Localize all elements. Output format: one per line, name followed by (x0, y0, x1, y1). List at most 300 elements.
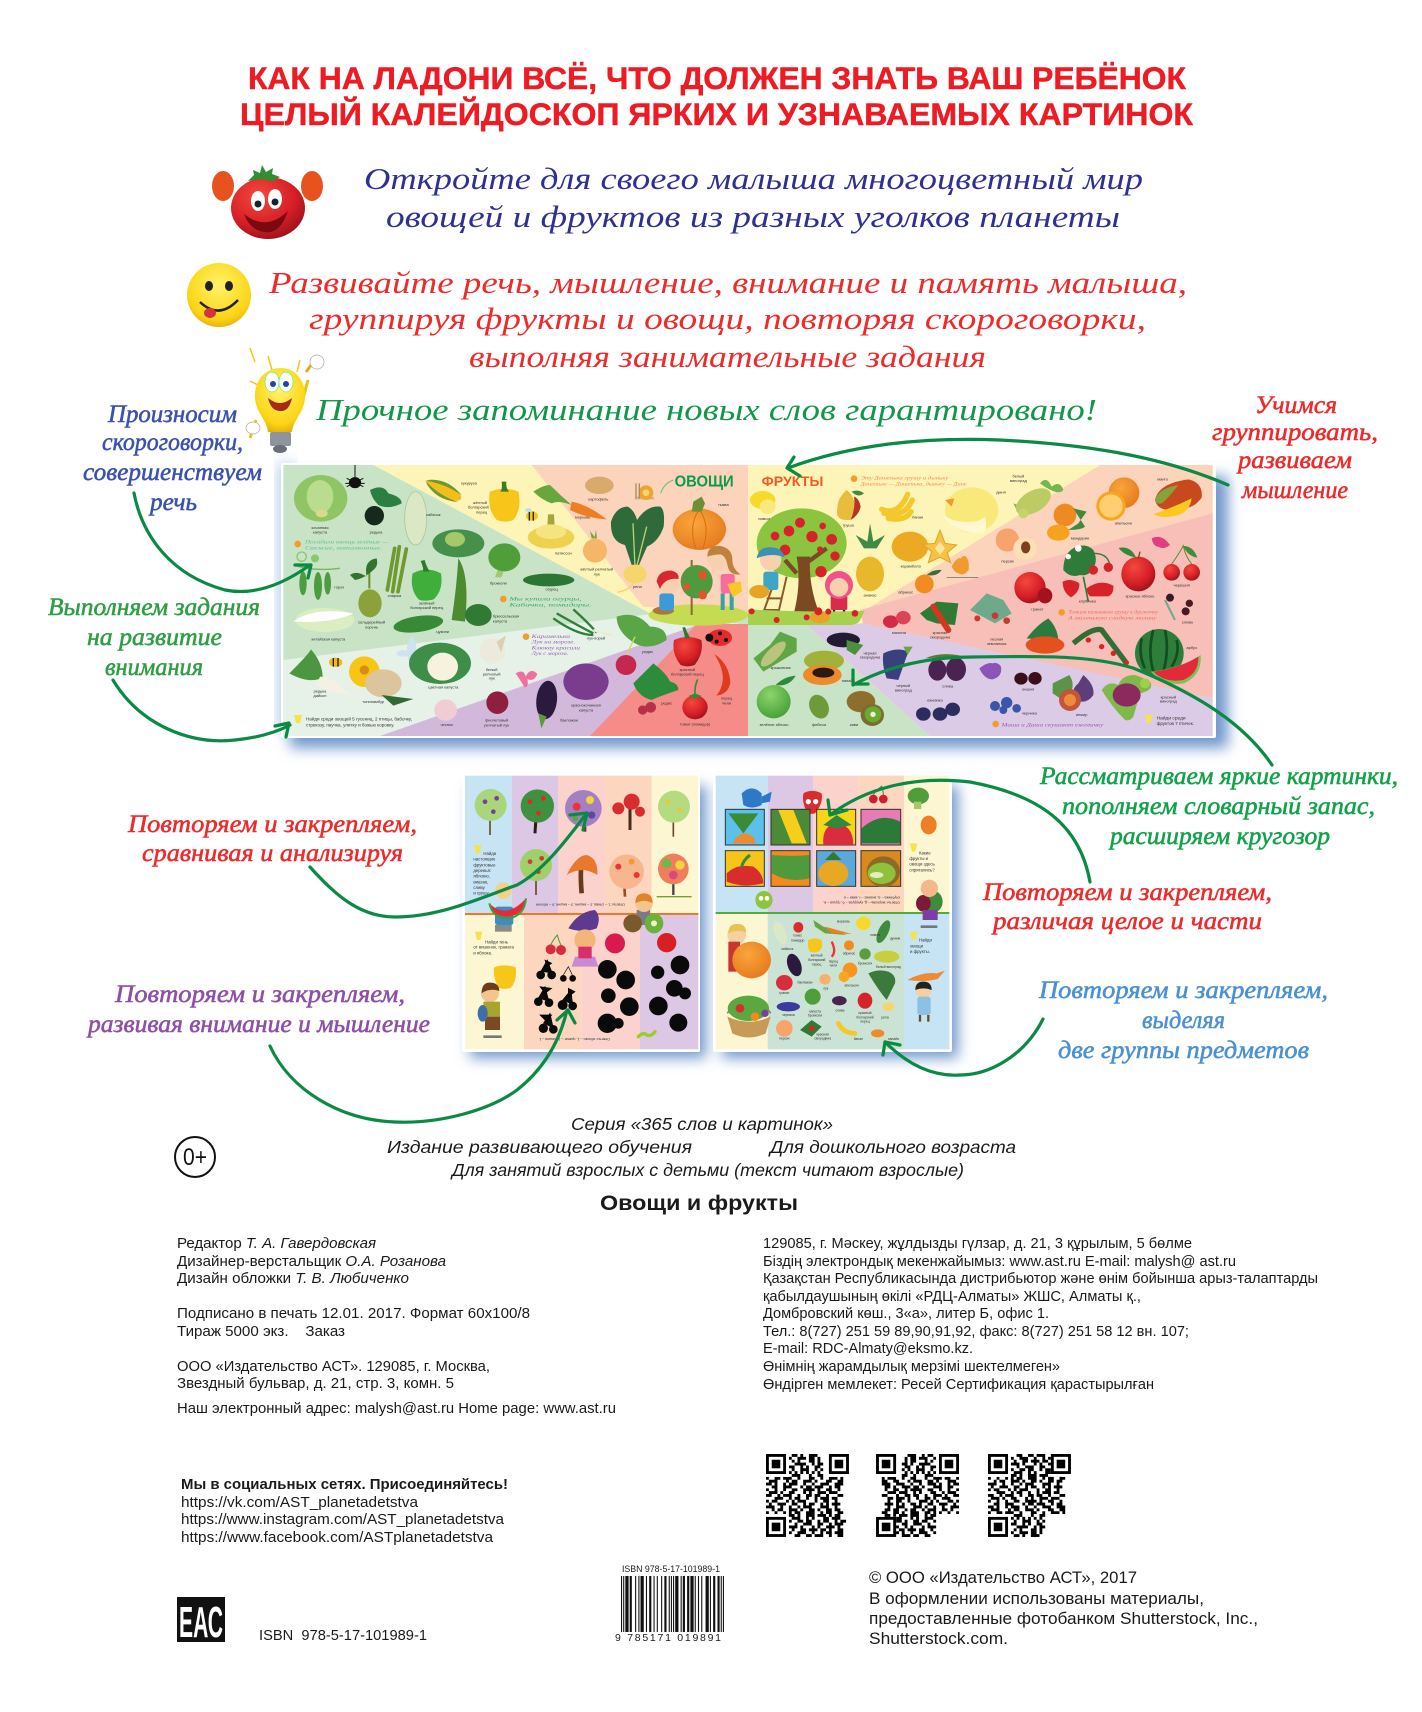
callout: picture vocabulary: Рассматриваем яркие картинки, (1039, 763, 1398, 790)
text: editors and imprint: Дизайн обложки Т. В. Любиченко (177, 1271, 409, 1287)
text: Kazakh imprint: E-mail: RDC-Almaty@eksmo.kz. (763, 1341, 973, 1357)
labels: fruit names: слива (1182, 620, 1194, 625)
text: Kazakh imprint: Өнімнің жарамдылық мерзімі шектелмеген» (763, 1359, 1060, 1375)
icon: spring onion (553, 609, 613, 636)
text: answers upside-down: Ответы: яблоко – 1, гранат – 1, вишня – 1 (539, 1037, 610, 1041)
icon: daikon (289, 649, 350, 695)
labels: fruit names: мандарин (1071, 535, 1089, 540)
labels: small fruit grid names: лимон (870, 933, 880, 937)
icon: cherries (1163, 546, 1200, 581)
icon: girl with grapes (568, 910, 599, 967)
icon: radishes small (633, 663, 678, 715)
labels: vegetable names: цветная капуста (428, 684, 459, 689)
callout: learn to group: мышление (1241, 477, 1348, 504)
text: editors and imprint (177, 1236, 616, 1417)
title: red headline: ЦЕЛЫЙ КАЛЕЙДОСКОП ЯРКИХ И УЗНАВАЕМЫХ КАРТИНОК (240, 96, 1194, 132)
icon: sunflower and jerusalem artichoke (349, 656, 413, 706)
labels: vegetable names: кочанная (312, 525, 328, 530)
labels: vegetable names: редис (642, 649, 653, 654)
labels: vegetable names: тыква (718, 502, 729, 507)
heading: ФРУКТЫ: ФРУКТЫ (762, 473, 823, 489)
labels: vegetable names: редька (314, 688, 327, 693)
icon: potato (585, 477, 614, 494)
text: series block: Издание развивающего обучения (387, 1137, 692, 1157)
callout: learn to group: Учимся (1255, 392, 1337, 419)
icon: cherry silhouettes (534, 960, 577, 1034)
icon: snail (634, 480, 673, 500)
panel: right activity page (713, 773, 958, 1058)
labels: fruit names: ежевика (927, 698, 943, 703)
hint: find shadow (473, 932, 515, 955)
heading: ОВОЩИ: ОВОЩИ (675, 474, 734, 491)
icon: ladybug (705, 629, 732, 646)
icon: light bulb character (246, 348, 324, 453)
labels: small fruit grid names: болгарский (808, 958, 825, 962)
hint: which fruits hid (909, 843, 936, 872)
icon: purple bird (979, 663, 1001, 679)
panel: vegetables page (283, 465, 748, 736)
icon: black currant (827, 633, 863, 655)
callout: two groups: две группы предметов (1058, 1037, 1309, 1064)
text: small script notes on fruits page: Тонким пальчиком грушу к дружочку (1068, 609, 1159, 616)
icon: mango (1153, 479, 1202, 517)
labels: small fruit grid names: перец (860, 1020, 870, 1024)
icon: rowan (1026, 618, 1064, 654)
icon: garlic (434, 699, 457, 721)
labels: vegetable names: дайкон (314, 693, 326, 698)
hint: find on fruits page (1145, 715, 1194, 726)
text: Kazakh imprint: 129085, г. Мәскеу, жұлдызды гүлзар, д. 21, 3 құрылым, 5 бөлме (763, 1236, 1192, 1252)
labels: vegetable names: краснокочанная (571, 703, 601, 708)
icon: black radish (365, 487, 402, 525)
labels: small fruit grid names: томат, (793, 934, 802, 938)
icon: orange bird (947, 556, 978, 577)
icon: fig (1053, 675, 1094, 711)
icon: watering can (742, 788, 772, 807)
icon: starfruit (892, 530, 957, 563)
callout: attention tasks: на развитие (87, 624, 222, 651)
labels: vegetable names: брюссельская (493, 614, 519, 619)
icon: patty pan squash (528, 514, 574, 549)
icon: oranges (1096, 477, 1139, 521)
heading: book title: Овощи и фрукты (600, 1192, 798, 1215)
labels: fruit names: виноград (1010, 478, 1027, 483)
text: answers upside-down: клубника – а, ананас – г, киви – е (844, 896, 900, 900)
labels: fruit names: малина (892, 630, 907, 635)
text: series block: Серия «365 слов и картинок» (571, 1114, 833, 1134)
icon: purple onion (486, 691, 508, 714)
icon: blackberry (916, 703, 960, 721)
callout: attention tasks: внимания (105, 654, 203, 681)
icon: brussels sprouts (432, 529, 492, 626)
labels: vegetable names: зелёный (419, 600, 435, 605)
labels: small fruit grid names: красный (859, 1011, 872, 1015)
icon: white onion (480, 636, 506, 664)
callout: attention tasks: Выполняем задания (48, 594, 260, 621)
text: answers upside-down: Ответы: морковь – д, кукуруза – б, груша – в, (823, 901, 900, 905)
text: small script notes on vegetables page: Мы купили огурцы, (508, 596, 582, 602)
icon: watermelon (1135, 629, 1201, 684)
labels: small fruit grid names: чили (830, 964, 837, 968)
callout: learn to group: группировать, (1212, 419, 1378, 446)
labels: fruit names: папайя (842, 678, 855, 683)
icon: tomato character (212, 165, 323, 239)
icon: dark cherries (1014, 672, 1042, 685)
labels: small fruit grid names: репа (881, 1015, 889, 1019)
icon: apple silhouettes (649, 956, 691, 1032)
icon: EAC mark: ЕАС (179, 1598, 223, 1647)
hint: find real fruit trees (473, 845, 625, 907)
callout: two groups (1038, 977, 1328, 1064)
callout: speak tongue twisters (83, 401, 262, 516)
labels: vegetable names: чеснок (440, 722, 453, 727)
labels: vegetable names: китайская капуста (312, 636, 346, 641)
icon: barcode (615, 1564, 724, 1644)
icon: boy with watermelon (489, 882, 526, 932)
arrow: compare to tree (310, 813, 587, 917)
labels: fruit names: персик (1001, 559, 1014, 564)
labels: fruit names: смородина (860, 655, 881, 660)
icon: gooseberry (753, 632, 797, 672)
top and bottom colour columns (465, 776, 698, 1049)
text: copyright: В оформлении использованы материалы, (869, 1590, 1204, 1608)
icon: strawberry plant (1063, 545, 1113, 602)
page backgrounds (283, 465, 748, 736)
labels: vegetable names: кабачок (426, 512, 441, 517)
icon: dark zucchini (392, 613, 444, 635)
labels: vegetable names: репчатый лук (484, 722, 509, 727)
labels: fruit names: зелёное яблоко (759, 722, 789, 727)
text: guaranteed memorising, green: Прочное запоминание новых слов гарантировано! (315, 392, 1097, 427)
labels: fruit names: киви (850, 722, 858, 727)
hint: find real fruit trees: и грушу. (473, 891, 490, 896)
icon: apple tree (757, 508, 847, 615)
icon: black grapes (883, 647, 913, 680)
icon: red grapes (1102, 675, 1151, 720)
text: Kazakh imprint: Домбровский көш., 3«а», литер Б, офис 1. (763, 1306, 1049, 1322)
icon: asparagus (387, 547, 406, 592)
text: open the world of vegetables (364, 161, 1143, 234)
labels: vegetable names: капуста (493, 618, 508, 623)
hint: find on fruits page: фруктов 7 птичек. (1157, 721, 1194, 726)
labels: small fruit grid names: болгарский (856, 1015, 874, 1019)
labels: fruit names: лесная (990, 636, 1003, 641)
labels: vegetable names: репчатый (483, 671, 501, 676)
callout: learn to group: развиваем (1236, 447, 1352, 474)
labels: fruit names: клубника (1079, 599, 1097, 604)
labels: fruit names: земляника (987, 641, 1007, 646)
labels: vegetable names: горох (334, 584, 344, 589)
labels: small fruit grid names: кабачок (781, 947, 794, 951)
labels: vegetable names: картофель (588, 496, 608, 501)
labels: vegetable names: болгарский перец (410, 605, 444, 610)
icon: barcode: ISBN 978-5-17-101989-1 (622, 1564, 720, 1574)
icon: girl with pink hood (825, 571, 853, 617)
icon: smiley face (187, 263, 251, 327)
icon: pepper character (803, 791, 822, 814)
page backgrounds (748, 465, 1213, 736)
icon: pomegranate (1014, 572, 1052, 603)
text: develop speech: выполняя занимательные задания (469, 339, 986, 374)
labels: small fruit grid names: белый виноград (876, 965, 901, 969)
icon: yellow pepper (489, 482, 520, 522)
arrow: twisters to peas (134, 493, 311, 591)
text: small script notes on fruits page (851, 475, 1159, 728)
icon: carrot (533, 485, 607, 519)
text: small script notes on vegetables page: Клюкву красили (530, 645, 580, 651)
text: editors and imprint: Редактор Т. А. Гавердовская (177, 1236, 376, 1252)
icon: bee small (329, 658, 342, 667)
icon: tomato (682, 679, 708, 719)
icon: man with beet (916, 880, 943, 927)
callout: speak tongue twisters: Произносим (107, 401, 237, 428)
icon: pink butterfly (516, 671, 537, 687)
text: copyright: © ООО «Издательство АСТ», 2017 (869, 1569, 1137, 1587)
icon: apple character (755, 891, 773, 909)
callout: speak tongue twisters: речь (148, 489, 197, 516)
labels: fruit names: слива (942, 684, 954, 689)
icon: pomegranate silhouettes (598, 960, 639, 1033)
labels: small fruit grid names (779, 919, 901, 1041)
icon: bee (525, 508, 538, 521)
text: small script notes on vegetables page: Свежие, витаминные. (305, 546, 382, 552)
labels: small fruit grid names: папайя (888, 1037, 899, 1041)
labels: fruit names: гранат (1031, 606, 1044, 611)
labels: small fruit grid names: смородина (814, 1037, 831, 1041)
labels: small fruit grid names: банан (854, 1037, 863, 1041)
picture grid: tile contents (727, 810, 900, 887)
hint: find shadow: и яблока. (473, 950, 492, 955)
icon: chinese cabbage (293, 608, 354, 632)
callout: picture vocabulary: расширяем кругозор (1108, 823, 1330, 850)
title: red headline (240, 60, 1194, 132)
text: social links: https://vk.com/AST_planetadetstva (181, 1495, 419, 1511)
text: copyright (869, 1569, 1258, 1648)
callout: attention tasks (48, 594, 260, 681)
labels: small fruit grid names: цукини (890, 936, 900, 940)
icon: turnip with leaves (611, 506, 664, 592)
hint: find vegetables and fruits: овощи (910, 943, 924, 948)
hint: find real fruit trees: сливу (473, 885, 486, 890)
labels: vegetable names: болгарский перец (671, 672, 704, 677)
icon: age rating 0+ (175, 1137, 215, 1177)
labels: small fruit grid names: баклажан (798, 980, 813, 984)
icon: boy with pumpkin (727, 924, 771, 978)
labels: fruit names: груша (843, 523, 855, 528)
text: series block (387, 1114, 1016, 1180)
text: editors and imprint: Подписано в печать 12.01. 2017. Формат 60х100/8 (177, 1306, 530, 1322)
labels: small fruit grid names: помидор (791, 939, 805, 943)
text: small script notes on fruits page: Эту Дашенька грушу и дыньку (861, 475, 949, 482)
icon: celeriac (350, 558, 382, 617)
hint: which fruits hid: Какие (919, 850, 931, 855)
text: small script notes on vegetables page: Лук на морозе. (530, 640, 575, 646)
labels: fruit names: арбуз (1186, 645, 1197, 650)
text: small script notes on fruits page: Маша и Даша скушают ежевичку (1000, 722, 1104, 728)
labels: vegetable names: морковь (575, 515, 590, 520)
icon: broccoli character (908, 788, 929, 809)
labels: fruit names: инжир (1076, 712, 1088, 717)
labels: fruit names: апельсин (1115, 520, 1132, 525)
text: social links: https://www.facebook.com/ASTplanetadetstva (181, 1530, 494, 1546)
text: develop speech (268, 265, 1187, 374)
icon: corn (422, 474, 465, 506)
labels: vegetable names: огурец (545, 586, 559, 591)
icon: berry branch (970, 593, 1012, 624)
icon: boy on ladder (749, 547, 787, 620)
callout: speak tongue twisters: совершенствуем (83, 459, 262, 486)
labels: vegetable names: чили (722, 700, 731, 705)
icon: green apple (757, 676, 796, 718)
text: small script notes on fruits page: А маленькую сладкую малину (1067, 614, 1157, 621)
labels: small fruit grid names: брокколи (858, 962, 872, 966)
labels: fruit names: смородина (930, 635, 951, 640)
icon: ground and fruit (748, 607, 865, 625)
icon: red currant (920, 602, 958, 630)
labels: small fruit grid names: апельсин (844, 984, 859, 988)
callout: whole and parts (982, 879, 1272, 935)
labels: small fruit grid names: абрикос (843, 952, 856, 956)
labels: vegetable names (312, 480, 733, 727)
labels: fruit names: красное яблоко (1126, 594, 1155, 599)
icon: white marrow (405, 492, 427, 545)
text: editors and imprint: Звездный бульвар, д. 21, стр. 3, комн. 5 (177, 1376, 454, 1392)
hint: find real fruit trees: деревья: (473, 868, 491, 873)
icon: grass hill (648, 604, 748, 626)
top and bottom colour columns (716, 776, 949, 1049)
labels: small fruit grid names: гранат (779, 991, 790, 995)
labels: vegetable names: лук (594, 571, 600, 576)
labels: small fruit grid names: слива (835, 1009, 845, 1013)
icon: melon (942, 487, 998, 533)
icon: mandarin (1047, 504, 1087, 541)
callout: attention and thinking: Повторяем и закрепляем, (114, 981, 405, 1008)
icon: white grapes (1011, 480, 1063, 521)
callout: speak tongue twisters: скороговорки, (102, 429, 243, 456)
labels: fruit names: лимон (758, 516, 770, 521)
labels: vegetable names: корень (365, 624, 378, 629)
icon: boy with kiwi (623, 893, 663, 933)
labels: vegetable names: топинамбур (362, 699, 385, 704)
text: develop speech: группируя фрукты и овощи, повторяя скороговорки, (309, 301, 1146, 336)
callout: learn to group (1212, 392, 1378, 504)
hint: find on vegetables page (294, 715, 412, 728)
text: small script notes on vegetables page: Кабачки, помидоры. (508, 601, 592, 608)
callout: compare and analyse: сравнивая и анализируя (142, 840, 403, 867)
icon: raspberries (883, 611, 911, 628)
icon: radish with leaves (614, 615, 667, 682)
callout: picture vocabulary: пополняем словарный запас, (1062, 793, 1375, 820)
labels: fruit names: фейхоа (812, 722, 827, 727)
text: develop speech: Развивайте речь, мышление, внимание и память малыша, (268, 265, 1187, 300)
text: small script notes on vegetables page (294, 539, 592, 657)
callout: whole and parts: Повторяем и закрепляем, (982, 879, 1272, 906)
icon: peach (996, 528, 1037, 560)
text: editors and imprint: ООО «Издательство АСТ». 129085, г. Москва, (177, 1359, 490, 1375)
icon: colour fruit references (546, 933, 676, 955)
text: Kazakh imprint: Өндірген мемлекет: Ресей Сертификация қарастырылған (763, 1377, 1154, 1393)
text: Kazakh imprint: Тел.: 8(727) 251 59 89,90,91,92, факс: 8(727) 251 58 12 вн. 107; (763, 1324, 1189, 1340)
labels: vegetable names: белый (486, 667, 498, 672)
arrow: two groups to papaya (883, 1019, 1043, 1075)
labels: small fruit grid names: персик (779, 1036, 790, 1040)
text: small script notes on vegetables page: Карамелька (530, 634, 570, 640)
hint: find shadow: Найди тень (485, 939, 509, 944)
icon: broccoli (488, 543, 520, 577)
hint: find real fruit trees: вишню, (473, 879, 488, 884)
icon: dragonfly (397, 637, 416, 663)
labels: vegetable names: цукини (436, 629, 449, 634)
icon: QR code 3 (988, 1454, 1074, 1540)
icon: barcode: 9 785171 019891 (615, 1632, 721, 1644)
panel: main spread shadow and frame (276, 462, 1228, 748)
icon: chili pepper (714, 654, 730, 696)
icon: rosehip branch (1073, 629, 1129, 665)
labels: vegetable names: лук (489, 676, 495, 681)
labels: vegetable names: томат (помидор) (680, 721, 711, 726)
labels: vegetable names: кукуруза (461, 480, 478, 485)
labels: vegetable names: патиссон (555, 550, 572, 555)
labels: vegetable names: жёлтый репчатый (580, 567, 613, 572)
labels: small fruit grid names: красная (816, 1032, 829, 1036)
icon: QR code 2 (873, 1454, 959, 1540)
labels: fruit names: банан (912, 514, 923, 519)
hint: which fruits hid: овощи здесь (909, 862, 936, 867)
labels: fruit names (758, 474, 1197, 727)
callout: two groups: Повторяем и закрепляем, (1038, 977, 1328, 1004)
callout: picture vocabulary (1039, 763, 1398, 850)
hint: find vegetables and fruits: Найди (919, 938, 932, 943)
icon: small fruit grid (771, 917, 899, 1037)
panel: left activity page (462, 773, 706, 1058)
labels: small fruit grid names: перец (829, 959, 838, 963)
text: small script notes on fruits page: Дашеньке — Дашенька, дыньку — Дине (859, 480, 967, 487)
icon: dark berries branch (1165, 594, 1193, 620)
icon: pumpkin (673, 497, 726, 550)
labels: small fruit grid names: капуста (809, 1009, 821, 1013)
labels: vegetable names: редис (661, 700, 672, 705)
text: editors and imprint: Дизайнер-верстальщик О.А. Розанова (177, 1254, 446, 1270)
labels: small fruit grid names: лук (823, 986, 829, 990)
icon: plums (925, 654, 970, 681)
fruit tree pictures (475, 789, 692, 897)
labels: fruit names: белый (1012, 474, 1024, 479)
icon: cherries at top (869, 786, 888, 803)
labels: vegetable names: сельдерейный (358, 620, 385, 625)
icon: girl watering (707, 546, 742, 610)
icon: pear (837, 490, 864, 520)
hint: find on vegetables page: Найди среди овощей 5 гусениц, 2 птицы, бабочку, (306, 717, 412, 722)
hint: find on vegetables page: стрекозу, паучка, улитку и божью коровку. (306, 723, 394, 728)
callout: two groups: выделяя (1142, 1007, 1225, 1034)
hint: which fruits hid: фрукты и (909, 856, 929, 861)
text: small script notes on vegetables page: Посадили овощи зелёные — (304, 539, 389, 546)
labels: vegetable names: перец (476, 509, 488, 514)
icon: girl with carrot (907, 971, 945, 1022)
icon: blueberries (990, 697, 1021, 714)
labels: small fruit grid names: брокколи (808, 1014, 822, 1018)
text: Kazakh imprint: қабылдаушының өкілі «РДЦ-Алматы» ЖШС, Алматы қ., (763, 1289, 1141, 1305)
icon: vegetable basket (727, 996, 771, 1037)
hint: which fruits hid: спрятались? (909, 867, 935, 872)
text: editors and imprint: Тираж 5000 экз. Заказ (177, 1324, 345, 1340)
labels: vegetable names: репа (633, 584, 643, 589)
labels: fruit names: виноград (895, 688, 912, 693)
callout: whole and parts: различая целое и части (991, 908, 1262, 935)
labels: fruit names: карамбола (901, 564, 922, 569)
text: open the world of vegetables: Откройте для своего малыша многоцветный мир (364, 161, 1143, 196)
callout: attention and thinking: развивая внимание и мышление (86, 1011, 430, 1038)
